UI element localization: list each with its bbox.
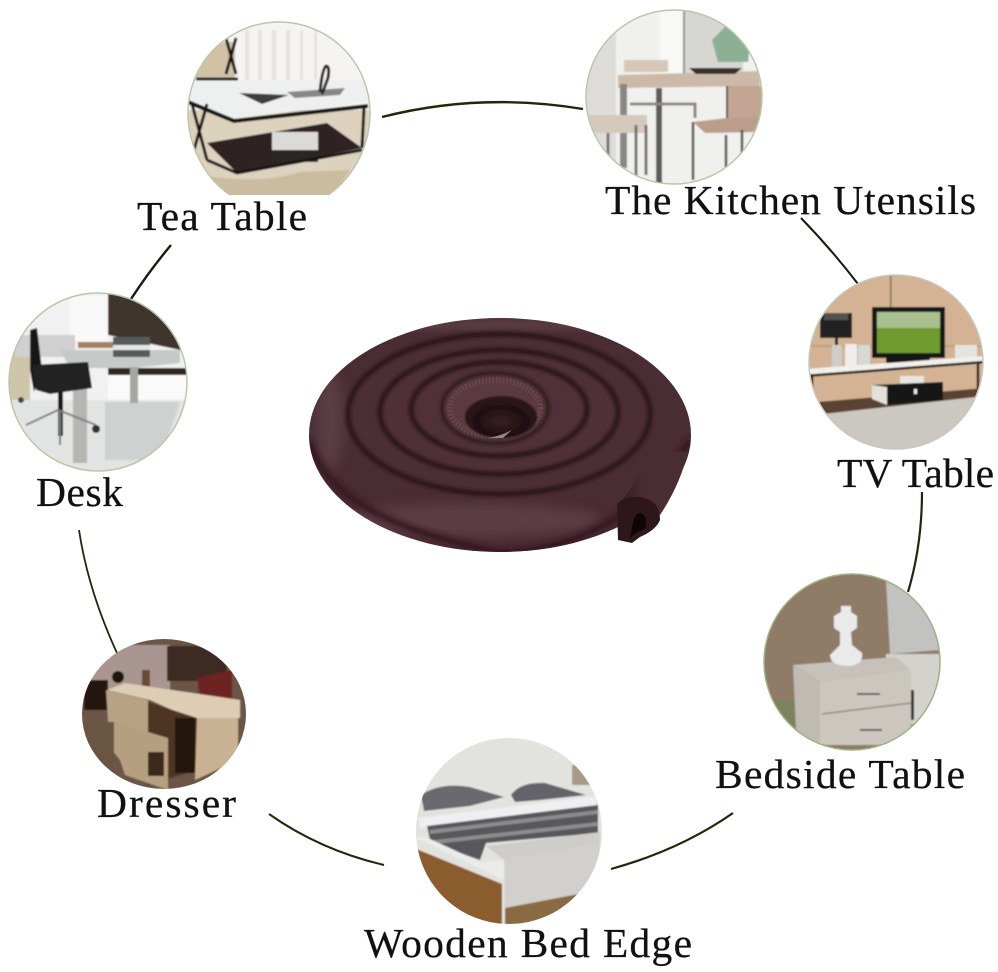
product: rolled foam edge protector (309, 318, 691, 552)
photo rings (9, 10, 983, 750)
connector: bedside table to bed edge (611, 813, 733, 869)
photo: wooden bed edge (412, 735, 607, 930)
label: The Kitchen Utensils: The Kitchen Utensils (605, 177, 976, 223)
coil body (309, 318, 691, 552)
free end of the strip (618, 444, 688, 515)
connector: desk to tea table (131, 245, 171, 299)
photo: desk (6, 290, 192, 474)
connector: dresser to desk (79, 530, 117, 653)
connector: bed edge to dresser (269, 814, 384, 865)
centre hole (465, 396, 537, 438)
photo: bedside table (764, 574, 940, 750)
label: Bedside Table: Bedside Table (715, 751, 965, 797)
white chess ornament (830, 606, 862, 666)
label: Dresser: Dresser (97, 780, 236, 826)
label: TV Table: TV Table (837, 450, 994, 496)
connector: tea table to kitchen (382, 102, 583, 117)
photo: tea table (185, 20, 375, 200)
label: Desk: Desk (36, 469, 123, 515)
label: Tea Table: Tea Table (137, 193, 307, 239)
photo: TV table (810, 276, 982, 448)
connector: kitchen to TV table (801, 218, 858, 284)
coil rings (348, 334, 650, 494)
photo: dresser (80, 636, 250, 792)
photo: kitchen dining table (585, 8, 765, 190)
label: Wooden Bed Edge: Wooden Bed Edge (364, 920, 692, 966)
connector: TV table to bedside table (908, 492, 922, 592)
nightstand (793, 657, 911, 681)
